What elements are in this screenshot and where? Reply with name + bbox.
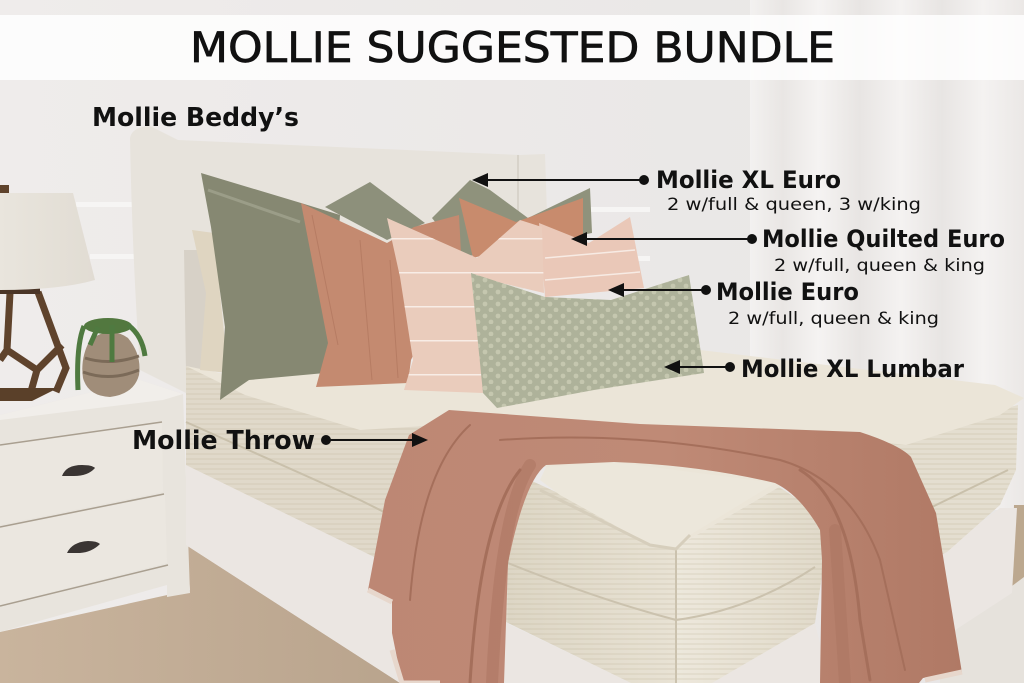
- pillow: Mollie Quilted Euro left: [301, 203, 461, 387]
- callout: Mollie Quilted Euro: Mollie Quilted Euro: [762, 225, 1005, 253]
- background: floor: [0, 545, 400, 683]
- mattress left side: [186, 366, 508, 623]
- pillow: Mollie XL Lumbar: [471, 273, 704, 408]
- callout: Mollie Throw: Mollie Throw: [132, 426, 315, 456]
- throw shadow folds: [410, 425, 905, 683]
- callout: Mollie XL Euro: 2 w/full & queen, 3 w/king: [667, 195, 921, 215]
- lamp: [0, 185, 95, 401]
- pillow: Mollie XL Euro back right: [432, 180, 592, 257]
- callout: Mollie XL Euro: [472, 166, 921, 215]
- title banner: [0, 15, 1024, 80]
- callout: Mollie XL Euro: Mollie XL Euro: [656, 166, 841, 194]
- wall moulding: [76, 202, 650, 261]
- callout: Mollie Euro: [608, 278, 939, 329]
- callout: Mollie Throw: [132, 426, 428, 456]
- callout: Mollie Quilted Euro: [571, 225, 1005, 276]
- callout: Mollie Quilted Euro: 2 w/full, queen & king: [774, 256, 985, 276]
- nightstand: [0, 380, 190, 632]
- quilt folded corner: [540, 462, 775, 549]
- pillow: Mollie XL Euro back left: [325, 182, 425, 240]
- plant pot: [78, 318, 145, 397]
- background: floor right: [1012, 505, 1024, 593]
- title: MOLLIE SUGGESTED BUNDLE: [190, 23, 835, 72]
- pillow: Mollie Euro right: [539, 217, 644, 297]
- pillow: beige insert: [192, 230, 228, 373]
- pillow: Mollie Euro left: [387, 218, 544, 393]
- background: curtain: [750, 0, 1024, 510]
- mattress top quilt: [186, 350, 1024, 547]
- drawer handle top: [62, 465, 95, 476]
- mattress front left panels: [508, 470, 676, 683]
- pillow: Mollie Quilted Euro right: [459, 198, 583, 258]
- callout: Mollie Euro: Mollie Euro: [716, 278, 859, 306]
- callout: Mollie Euro: 2 w/full, queen & king: [728, 309, 939, 329]
- mattress right side: [880, 405, 1018, 560]
- headboard: [130, 126, 547, 393]
- throw blanket: [368, 410, 962, 683]
- drawer handle bottom: [67, 541, 100, 553]
- callout: Mollie XL Lumbar: Mollie XL Lumbar: [741, 355, 964, 383]
- mattress front right panels: [676, 487, 830, 683]
- pillow: Mollie XL Euro front: [201, 173, 340, 400]
- bed base: [186, 462, 1017, 683]
- background: rug: [940, 577, 1024, 683]
- heading: Mollie Beddy's: Mollie Beddy’s: [92, 103, 299, 133]
